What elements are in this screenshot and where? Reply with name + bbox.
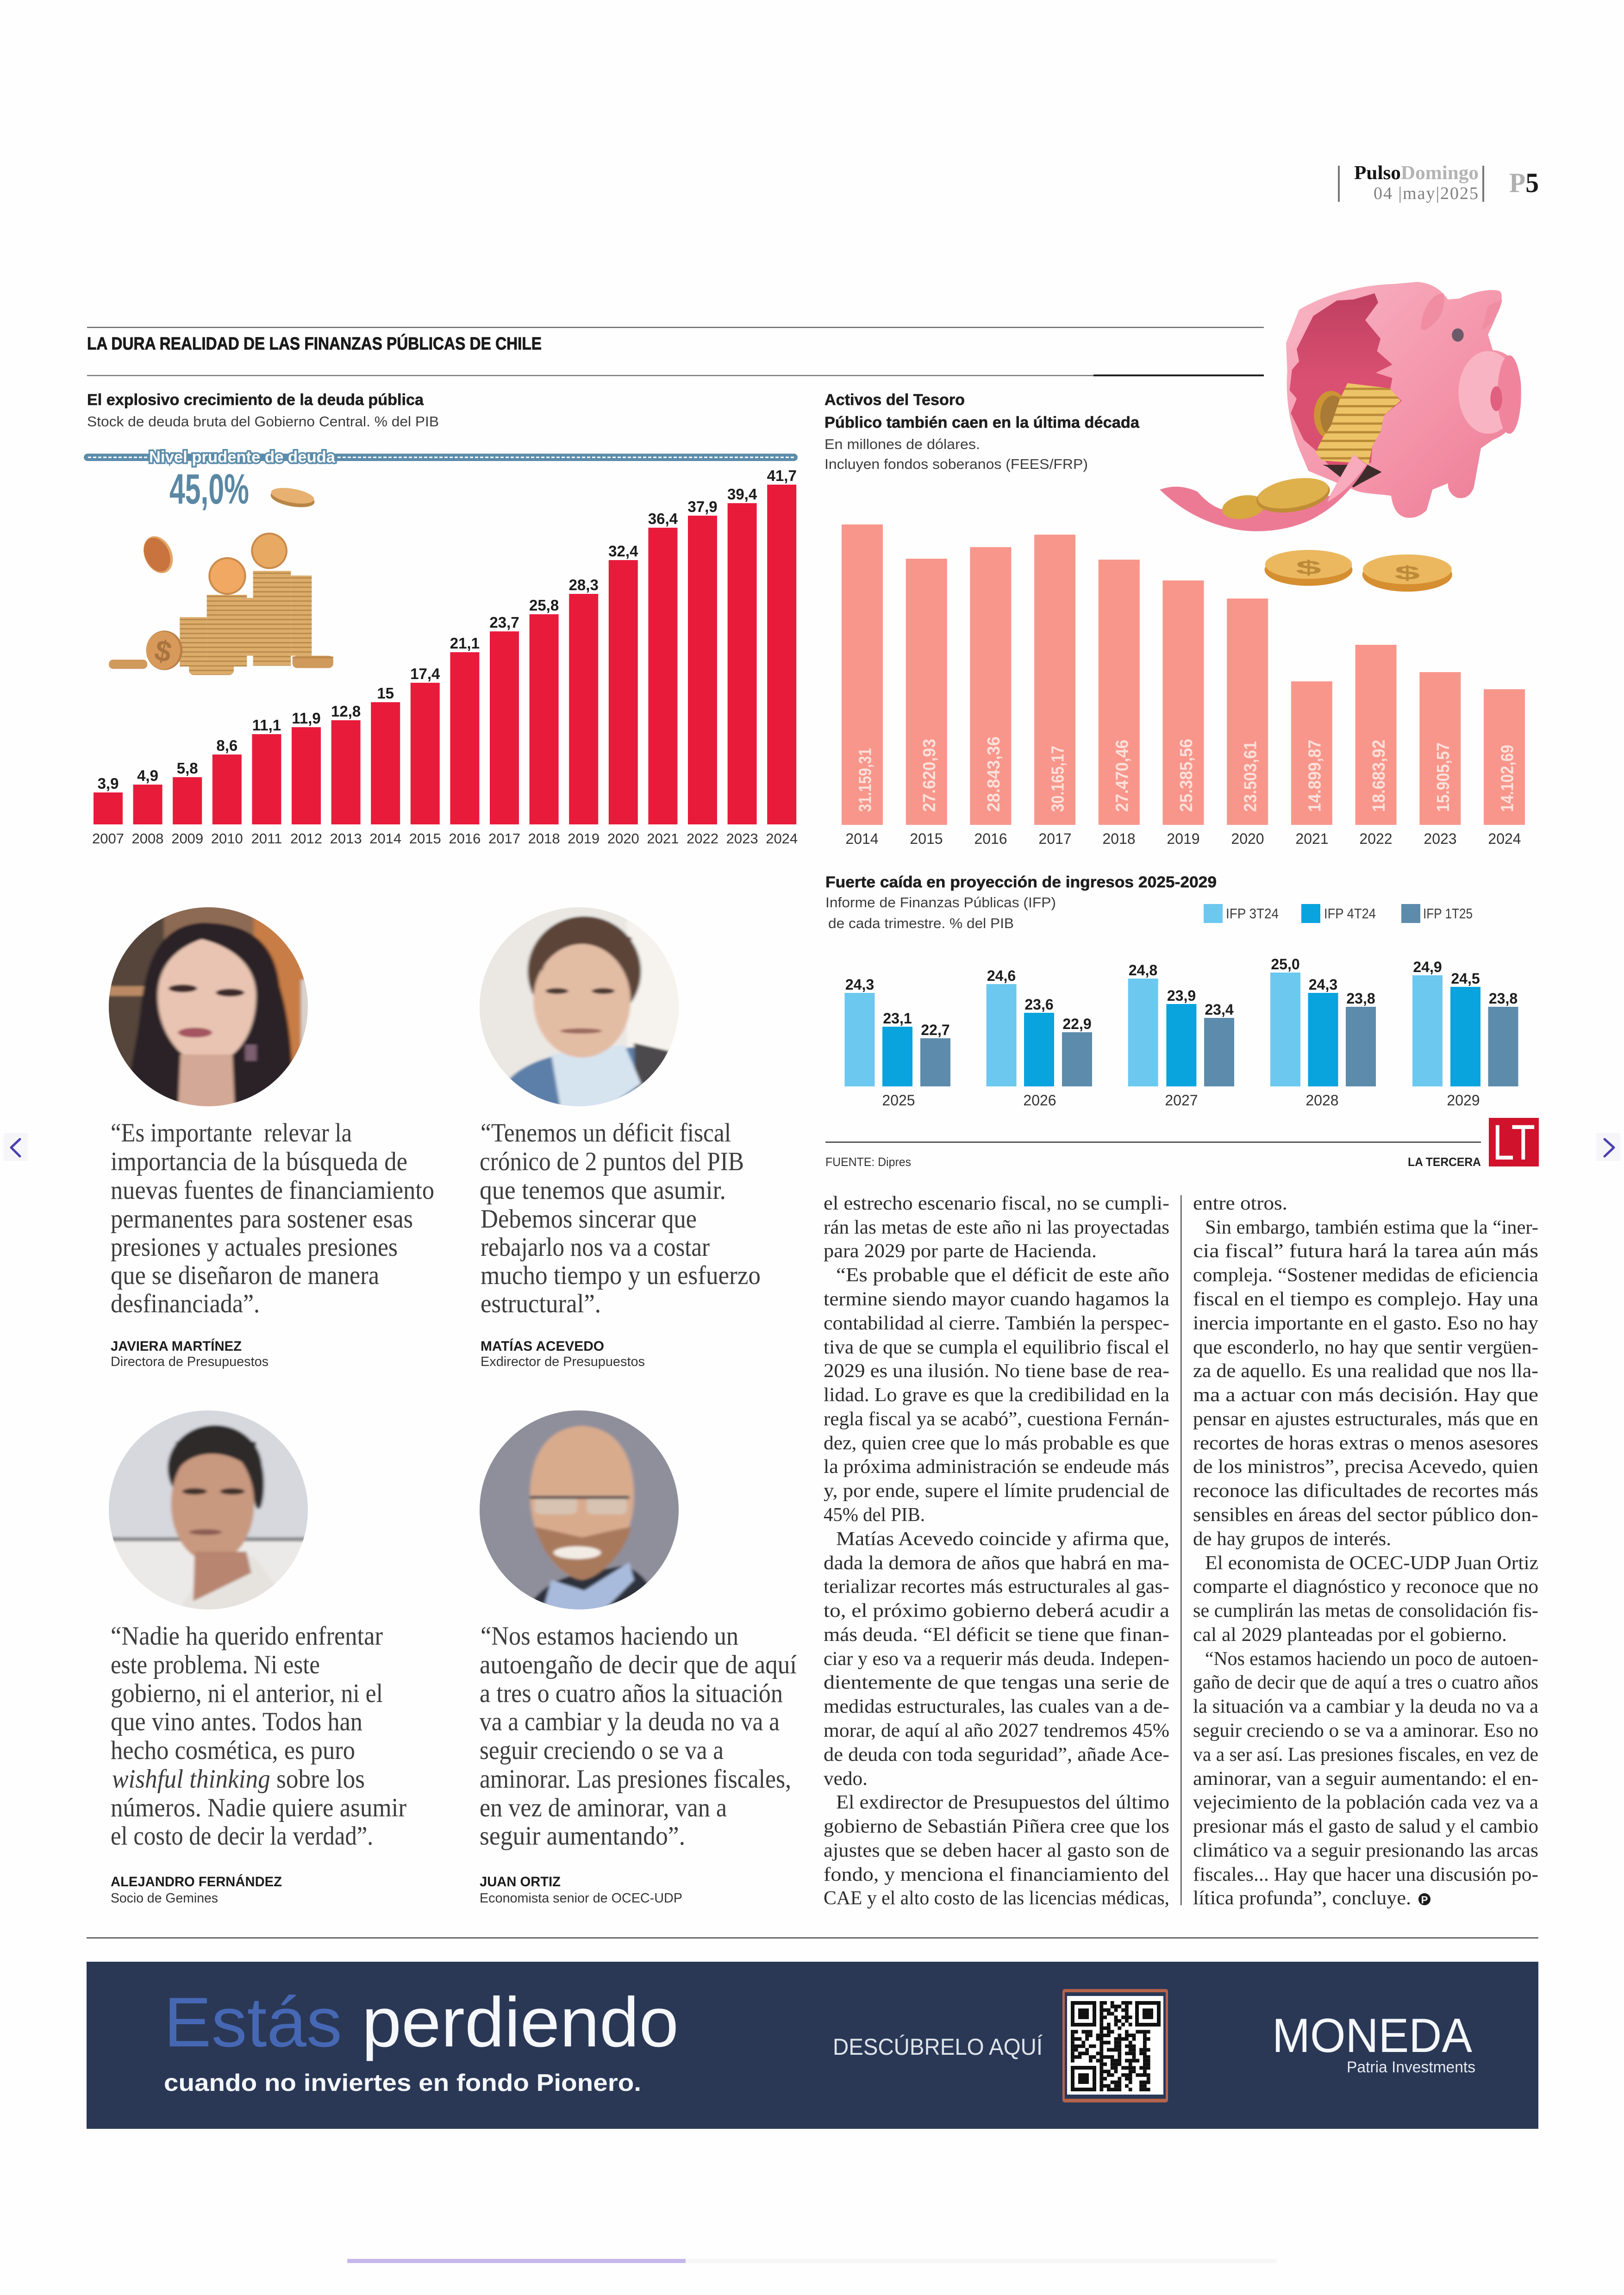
quote: Juan Ortiz: en vez de aminorar, van a (480, 1793, 727, 1822)
icon: end mark P (1418, 1893, 1430, 1906)
quote: Juan Ortiz: “Nos estamos haciendo un (481, 1621, 738, 1651)
article column 2: El economista de OCEC-UDP Juan Ortiz (1205, 1553, 1538, 1574)
quote: Javiera Martínez (111, 1118, 434, 1318)
article column 1: to, el próximo gobierno deberá acudir a (824, 1600, 1169, 1621)
article column 2: za de aquello. Es una realidad que nos lla- (1193, 1360, 1538, 1382)
quote: Matías Acevedo: mucho tiempo y un esfuerzo (481, 1261, 761, 1290)
quote: Javiera Martínez: “Es importante relevar la (111, 1118, 352, 1148)
x axis years: deuda: 2010 (211, 830, 243, 847)
bars: IFP 1T25 (920, 1007, 1518, 1086)
bar values: deuda: 25,8 (529, 597, 559, 614)
role: Directora de Presupuestos: Directora de Presupuestos (111, 1354, 269, 1369)
bar values: deuda: 17,4 (410, 665, 440, 682)
article column 2: pensar en ajustes estructurales, más que en (1193, 1409, 1538, 1430)
bar values: deuda: 21,1 (450, 635, 480, 652)
bar values: ingresos: 24,8 (1129, 962, 1157, 979)
big figure 45,0%: 45,0% (169, 466, 249, 513)
quote: Matías Acevedo: que tenemos que asumir. (480, 1176, 726, 1205)
name: Javiera Martínez: JAVIERA MARTÍNEZ (111, 1338, 242, 1354)
article column 2: gaño de decir que de aquí a tres o cuatro años (1193, 1672, 1538, 1693)
x axis years: deuda: 2023 (726, 830, 758, 847)
article column 1: 45% del PIB. (824, 1504, 925, 1526)
logo: LT: LT (1493, 1114, 1535, 1170)
article column 1 (824, 1193, 1169, 1909)
article column 1: CAE y el alto costo de las licencias médicas, (824, 1888, 1169, 1909)
bars: IFP 4T24 (882, 987, 1480, 1086)
page header (1338, 162, 1539, 203)
quote card: Alejandro Fernández (102, 1406, 406, 1906)
bar values: activos: 25.385,56 (1177, 739, 1196, 812)
bar values: deuda: 5,8 (177, 760, 198, 777)
quote: Javiera Martínez: desfinanciada”. (111, 1289, 260, 1318)
article column 2: de hay grupos de interés. (1193, 1528, 1391, 1550)
x axis years: deuda: 2019 (568, 830, 600, 847)
article column 1: terializar recortes más estructurales al gas- (824, 1576, 1169, 1597)
article column 1: ajustes que se deben hacer al gasto son de (824, 1840, 1169, 1861)
bar values: deuda: 11,9 (292, 710, 321, 727)
portrait: Alejandro Fernández (102, 1406, 315, 1615)
article column 1: y, por ende, supere el límite prudencial de (824, 1480, 1169, 1502)
quote: Matías Acevedo: estructural”. (481, 1289, 601, 1318)
bar values: activos: 14.102,69 (1498, 745, 1518, 812)
article column 1: vedo. (824, 1768, 868, 1790)
x axis years: activos: 2018 (1102, 830, 1136, 847)
bar values: deuda: 28,3 (569, 576, 599, 593)
bar values: deuda: 3,9 (98, 775, 119, 792)
bar values: ingresos: 24,3 (845, 976, 874, 993)
article column 1: dez, quien cree que lo más probable es que (824, 1433, 1169, 1454)
illustration: broken piggy bank: $ (1296, 557, 1321, 579)
article column 1: morar, de aquí al año 2027 tendremos 45% (824, 1720, 1169, 1741)
legend: IFP 3T24 (1226, 905, 1279, 922)
quote: Alejandro Fernández: “Nadie ha querido enfrentar (111, 1621, 383, 1651)
article column 1: dientemente de que tengas una serie de (824, 1672, 1169, 1693)
credit: LA TERCERA (1408, 1155, 1481, 1169)
bar values: activos: 31.159,31 (856, 748, 875, 812)
article column 2: reconoce las dificultades de recortes más (1193, 1480, 1538, 1502)
article column 1: Matías Acevedo coincide y afirma que, (836, 1528, 1169, 1550)
x axis years: deuda: 2009 (171, 830, 203, 847)
bar values: ingresos: 23,1 (883, 1010, 912, 1027)
article column 2: cal al 2029 planteadas por el gobierno. (1193, 1624, 1507, 1646)
quote: Javiera Martínez: permanentes para sostener esas (111, 1204, 413, 1234)
role: Exdirector de Presupuestos: Exdirector de Presupuestos (481, 1354, 645, 1369)
article column 1: rán las metas de este año ni las proyectadas (824, 1217, 1169, 1238)
article column 2: seguir creciendo o se va a aminorar. Eso no (1193, 1720, 1538, 1741)
bar values: ingresos: 23,8 (1346, 990, 1375, 1007)
x axis years: deuda: 2011 (251, 830, 282, 847)
bar values: ingresos: 22,9 (1062, 1016, 1092, 1032)
bar values: activos: 14.899,87 (1305, 740, 1324, 812)
quote: Alejandro Fernández: gobierno, ni el anterior, ni el (111, 1679, 383, 1708)
article column 1: gobierno de Sebastián Piñera cree que los (824, 1816, 1169, 1837)
bar values: ingresos: 24,6 (987, 967, 1016, 984)
quote: Matías Acevedo: rebajarlo nos va a costar (481, 1233, 710, 1262)
quote: Juan Ortiz (480, 1621, 797, 1851)
x axis years: deuda: 2007 (92, 830, 124, 847)
article column 1: lidad. Lo grave es que la credibilidad en la (824, 1384, 1169, 1406)
illustration: flying coin (269, 485, 316, 510)
quote: Javiera Martínez: que se diseñaron de manera (111, 1261, 379, 1290)
article column 1: de deuda con toda seguridad”, añade Ace- (824, 1744, 1169, 1765)
quote: Alejandro Fernández: este problema. Ni este (111, 1650, 320, 1679)
illustration: coin stacks (109, 531, 333, 675)
article column 2: aminorar, van a seguir aumentando: el en- (1193, 1768, 1538, 1790)
article column 2: Sin embargo, también estima que la “iner- (1205, 1217, 1538, 1238)
article column 2: vejecimiento de la población cada vez va a (1193, 1792, 1538, 1813)
illustration: broken piggy bank (1160, 282, 1521, 592)
bar values: activos: 27.620,93 (920, 739, 939, 812)
chart subheading: Informe de Finanzas Públicas (IFP) (825, 894, 1056, 911)
x axis years: activos: 2023 (1424, 830, 1457, 847)
article column 2: que esconderlo, no hay que sentir vergüen- (1193, 1337, 1538, 1358)
article column 1: 2029 es una ilusión. No tiene base de rea- (824, 1360, 1169, 1382)
article column 1: tiva de que se cumpla el equilibrio fiscal el (824, 1337, 1169, 1358)
x axis years: ingresos (882, 1092, 1480, 1109)
illustration: broken piggy bank: $ (1394, 562, 1420, 584)
name: Matías Acevedo: MATÍAS ACEVEDO (481, 1338, 604, 1354)
quote card: Matías Acevedo (471, 902, 761, 1369)
x axis years: ingresos: 2026 (1023, 1092, 1056, 1109)
illustration: coin stacks: $ (152, 634, 175, 669)
article column 2: presionar más el gasto de salud y el cambio (1193, 1816, 1538, 1837)
x axis years: ingresos: 2027 (1165, 1092, 1198, 1109)
bar values: deuda: 15 (377, 685, 394, 702)
article column 1: dada la demora de años que habrá en ma- (824, 1553, 1169, 1574)
quote: Javiera Martínez: nuevas fuentes de financiamiento (111, 1176, 434, 1205)
ad logo: Moneda: MONEDA (1272, 2009, 1473, 2063)
portrait: Matías Acevedo (471, 902, 684, 1110)
QR code (1062, 1989, 1168, 2102)
bar values: activos: 27.470,46 (1112, 740, 1132, 812)
x axis years: activos: 2019 (1167, 830, 1200, 847)
reference line: nivel prudente de deuda (84, 448, 798, 466)
chart subheading: En millones de dólares. (824, 436, 980, 452)
x axis years: deuda: 2022 (687, 830, 718, 847)
bar values: activos: 18.683,92 (1369, 740, 1389, 812)
article column 2: climático va a seguir presionando las arcas (1193, 1840, 1538, 1861)
role: Socio de Gemines: Socio de Gemines (111, 1891, 218, 1906)
bar values: ingresos: 23,4 (1205, 1001, 1234, 1018)
advertisement banner (87, 1962, 1538, 2129)
bar values: deuda: 36,4 (648, 510, 678, 527)
article column 1: medidas estructurales, las cuales van a de- (824, 1696, 1169, 1717)
x axis years: activos: 2016 (974, 830, 1007, 847)
article column 2: va a ser así. Las presiones fiscales, en vez de (1193, 1744, 1538, 1765)
article column 2: se cumplirán las metas de consolidación fis- (1193, 1600, 1538, 1621)
article column 1: fondo, y menciona el financiamiento del (824, 1864, 1169, 1885)
quote card: Javiera Martínez (102, 902, 434, 1369)
title: LA DURA REALIDAD DE LAS FINANZAS PÚBLICAS DE CHILE (87, 333, 542, 354)
name: Alejandro Fernández: ALEJANDRO FERNÁNDEZ (111, 1874, 282, 1890)
x axis years: activos: 2015 (910, 830, 943, 847)
quote: Matías Acevedo: Debemos sincerar que (481, 1204, 697, 1234)
ad logo tagline: Patria Investments (1347, 2058, 1475, 2076)
x axis years: deuda: 2021 (647, 830, 679, 847)
chart heading (824, 391, 1140, 431)
x axis years: deuda: 2014 (369, 830, 401, 847)
x axis years: activos: 2024 (1488, 830, 1521, 847)
chart panel: deuda pública (84, 391, 798, 847)
quote: Alejandro Fernández: el costo de decir la verdad”. (111, 1821, 373, 1851)
source note: FUENTE: Dipres (825, 1155, 911, 1169)
legend: IFP 1T25 (1423, 905, 1473, 922)
article column 1: más deuda. “El déficit se tiene que finan- (824, 1624, 1169, 1646)
quote: Alejandro Fernández: números. Nadie quiere asumir (111, 1793, 406, 1822)
reference line: nivel prudente de deuda: Nivel prudente de deuda (149, 448, 336, 466)
bar values: activos: 23.503,61 (1241, 741, 1261, 812)
article column 2: compleja. “Sostener medidas de eficiencia (1193, 1265, 1538, 1286)
chart heading: Fuerte caída en proyección de ingresos 2025-2029 (825, 873, 1217, 891)
quote: Juan Ortiz: autoengaño de decir que de aquí (480, 1650, 797, 1679)
bar values: deuda: 37,9 (687, 498, 718, 515)
bar values: deuda: 11,1 (252, 717, 281, 734)
arrow: next page (1596, 1133, 1620, 1161)
x axis years: activos: 2014 (845, 830, 879, 847)
legend (1204, 904, 1473, 923)
article column 1: el estrecho escenario fiscal, no se cumpli- (824, 1193, 1169, 1214)
chart subheading: de cada trimestre. % del PIB (828, 915, 1014, 931)
article column 1: El exdirector de Presupuestos del último (836, 1792, 1169, 1813)
article column 2: cia fiscal” futura hará la tarea aún más (1193, 1241, 1538, 1262)
chart subheading: Stock de deuda bruta del Gobierno Central. % del PIB (87, 413, 439, 430)
quote: Javiera Martínez: presiones y actuales presiones (111, 1233, 398, 1262)
bar values: deuda (98, 467, 797, 792)
bars: activos (842, 524, 1525, 825)
article column 2: sensibles en áreas del sector público don- (1193, 1504, 1538, 1526)
quote: Juan Ortiz: a tres o cuatro años la situación (480, 1679, 783, 1708)
bar values: deuda: 8,6 (216, 737, 237, 754)
x axis years: activos: 2017 (1038, 830, 1072, 847)
chart subheading (824, 436, 1088, 472)
article body text (824, 1193, 1538, 1909)
bar values: ingresos: 23,8 (1489, 990, 1518, 1007)
article column 1: para 2029 por parte de Hacienda. (824, 1241, 1097, 1262)
quote: Alejandro Fernández (111, 1621, 406, 1851)
portrait: Javiera Martínez (109, 907, 308, 1106)
ad subline: cuando no inviertes en fondo Pionero. (164, 2070, 641, 2096)
x axis years: deuda: 2024 (766, 830, 798, 847)
bar values: activos (856, 736, 1518, 812)
viewer scrollbar (347, 2259, 1277, 2263)
bar values: deuda: 32,4 (608, 543, 638, 560)
quote: Alejandro Fernández: hecho cosmética, es puro (111, 1736, 355, 1765)
quote: Alejandro Fernández: wishful thinking sobre los (112, 1765, 365, 1794)
quote: Juan Ortiz: seguir creciendo o se va a (480, 1736, 724, 1765)
bar values: activos: 28.843,36 (984, 736, 1004, 812)
bar values: deuda: 39,4 (727, 486, 757, 503)
article column 1: ciar y eso va a requerir más deuda. Indepen- (824, 1648, 1169, 1670)
quote: Alejandro Fernández: que vino antes. Todos han (111, 1707, 362, 1736)
x axis years: deuda (92, 830, 798, 847)
article column 2: inercia importante en el gasto. Eso no hay (1193, 1313, 1538, 1334)
x axis years: activos (845, 830, 1521, 847)
chart subheading: Incluyen fondos soberanos (FEES/FRP) (824, 456, 1088, 472)
x axis years: ingresos: 2028 (1305, 1092, 1339, 1109)
article column 2: lítica profunda”, concluye. (1193, 1888, 1411, 1909)
bar values: ingresos: 23,6 (1024, 996, 1054, 1013)
bar values: activos: 30.165,17 (1049, 746, 1068, 812)
quote card: Juan Ortiz (471, 1406, 797, 1906)
article column 2: ma a actuar con más decisión. Hay que (1193, 1384, 1538, 1406)
x axis years: ingresos: 2029 (1447, 1092, 1480, 1109)
portrait: Juan Ortiz (471, 1406, 684, 1615)
quote: Juan Ortiz: aminorar. Las presiones fiscales, (480, 1765, 791, 1794)
chart panel: activos del tesoro (824, 391, 1525, 847)
chart panel: proyección de ingresos (825, 873, 1518, 1109)
bar values: ingresos: 25,0 (1271, 956, 1300, 973)
source footer (825, 1114, 1539, 1170)
article column 2: fiscales... Hay que hacer una discusión po- (1193, 1864, 1538, 1885)
article column 2: la situación va a cambiar y la deuda no va a (1193, 1696, 1538, 1717)
article column 2: fiscal en el tiempo es complejo. Hay una (1193, 1289, 1538, 1310)
bar values: ingresos: 23,9 (1167, 987, 1196, 1004)
bar values: deuda: 4,9 (137, 767, 158, 784)
article column 1: termine siendo mayor cuando hagamos la (824, 1289, 1169, 1310)
x axis years: activos: 2022 (1359, 830, 1393, 847)
legend: IFP 4T24 (1324, 905, 1376, 922)
bar values: activos: 15.905,57 (1434, 742, 1453, 812)
quote: Juan Ortiz: va a cambiar y la deuda no va a (480, 1707, 780, 1736)
x axis years: deuda: 2016 (449, 830, 481, 847)
article column 2: “Nos estamos haciendo un poco de autoen- (1205, 1648, 1538, 1670)
ad call to action: DESCÚBRELO AQUÍ (833, 2034, 1043, 2060)
quote: Matías Acevedo: crónico de 2 puntos del PIB (480, 1147, 744, 1176)
x axis years: ingresos: 2025 (882, 1092, 915, 1109)
x axis years: deuda: 2018 (528, 830, 560, 847)
bar values: ingresos: 24,3 (1309, 976, 1337, 993)
x axis years: deuda: 2017 (488, 830, 520, 847)
article column 1: “Es probable que el déficit de este año (836, 1265, 1169, 1286)
bar values: ingresos: 24,5 (1451, 970, 1480, 987)
chart heading: El explosivo crecimiento de la deuda pública (87, 391, 424, 409)
article column 2: de los ministros”, precisa Acevedo, quien (1193, 1456, 1538, 1478)
x axis years: activos: 2020 (1231, 830, 1264, 847)
header: page number: P5 (1509, 168, 1539, 198)
bar values: deuda: 12,8 (331, 703, 361, 720)
header: date: 04 |may|2025 (1374, 184, 1478, 203)
chart heading: Público también caen en la última década (824, 414, 1140, 431)
x axis years: deuda: 2020 (607, 830, 639, 847)
arrow: previous page (4, 1133, 28, 1161)
quote: Matías Acevedo (480, 1118, 761, 1318)
article column 2 (1193, 1193, 1538, 1909)
article column 2: entre otros. (1193, 1193, 1287, 1214)
x axis years: activos: 2021 (1295, 830, 1329, 847)
article column 2: comparte el diagnóstico y reconoce que no (1193, 1576, 1538, 1597)
x axis years: deuda: 2013 (330, 830, 362, 847)
article column 1: regla fiscal ya se acabó”, cuestiona Fernán- (824, 1409, 1169, 1430)
bars: deuda (94, 485, 796, 824)
header: section name: PulsoDomingo (1354, 162, 1479, 184)
bar values: ingresos: 22,7 (921, 1022, 950, 1038)
bar values: deuda: 23,7 (489, 614, 519, 631)
bar values: ingresos: 24,9 (1413, 959, 1442, 975)
title band (87, 327, 1264, 376)
x axis years: deuda: 2008 (132, 830, 163, 847)
quote: Javiera Martínez: importancia de la búsqueda de (111, 1147, 407, 1176)
bars: IFP 3T24 (844, 973, 1443, 1086)
chart subheading (825, 894, 1056, 931)
icon: end mark P: P (1421, 1894, 1428, 1906)
bar values: ingresos (845, 956, 1518, 1038)
quote: Matías Acevedo: “Tenemos un déficit fiscal (481, 1118, 731, 1148)
bar values: deuda: 41,7 (767, 467, 797, 484)
article column 2: recortes de horas extras o menos asesores (1193, 1433, 1538, 1454)
article column 1: la próxima administración se endeude más (824, 1456, 1169, 1478)
role: Economista senior de OCEC-UDP: Economista senior de OCEC-UDP (480, 1891, 682, 1906)
article column 1: contabilidad al cierre. También la perspec- (824, 1313, 1169, 1334)
name: Juan Ortiz: JUAN ORTIZ (480, 1874, 561, 1890)
x axis years: deuda: 2012 (290, 830, 322, 847)
ad headline: Estás perdiendo (164, 1983, 679, 2062)
x axis years: deuda: 2015 (409, 830, 441, 847)
quote: Juan Ortiz: seguir aumentando”. (480, 1821, 685, 1851)
chart heading: Activos del Tesoro (824, 391, 965, 409)
